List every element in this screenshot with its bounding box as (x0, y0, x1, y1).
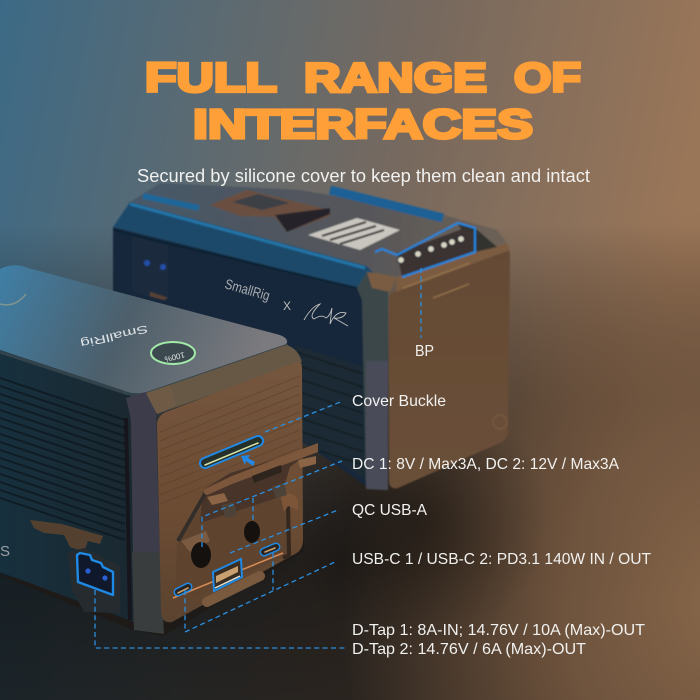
logo: SmallRig rear: SmallRig (223, 276, 272, 304)
rear device side face (113, 227, 366, 486)
rear device blue edge band (113, 202, 378, 288)
title: RANGE (304, 54, 487, 100)
label: USB-A: QC USB-A (352, 502, 427, 519)
leader: BP (420, 268, 422, 338)
cover teeth (252, 465, 282, 483)
end-face ribs (160, 376, 300, 504)
cover left knob (181, 531, 210, 552)
label: DC: DC 1: 8V / Max3A, DC 2: 12V / Max3A (352, 456, 619, 473)
cover plate (200, 447, 317, 523)
USB-C port 2 (264, 547, 276, 552)
logo: signature (304, 304, 348, 326)
spec label (308, 218, 400, 250)
cover bolts (221, 483, 287, 518)
front battery device (0, 265, 318, 636)
corner pillar (357, 272, 397, 490)
cover buckle slot (205, 441, 258, 465)
D-Tap port (68, 548, 120, 613)
front device top face (0, 265, 287, 394)
cover left arm (178, 494, 205, 541)
USB-A port (213, 559, 242, 591)
recessed port area (175, 480, 288, 606)
label: Cover Buckle: Cover Buckle (352, 393, 446, 410)
title: INTERFACES (193, 101, 533, 147)
rear battery device (113, 183, 510, 490)
label: BP: BP (415, 343, 434, 360)
BP terminal (375, 223, 497, 277)
DC port 1 (191, 542, 211, 568)
leader lines (95, 268, 421, 648)
indicator ring 100%: 100% (164, 350, 186, 364)
bottom orange light strip (173, 553, 283, 598)
indicator ring 100% (151, 342, 195, 364)
bottom pull handle (207, 576, 260, 602)
USB-C port 1 (178, 587, 188, 593)
DC port 2 (244, 521, 260, 543)
front corner pillar (126, 392, 162, 630)
label: D-Tap 2: D-Tap 2: 14.76V / 6A (Max)-OUT (352, 641, 586, 658)
subtitle: Secured by silicone cover to keep them clean and intact (137, 166, 590, 186)
front device ribs (0, 378, 125, 540)
leader: cover buckle (265, 401, 343, 432)
latch on rear left (132, 236, 168, 298)
label: D-Tap 1: D-Tap 1: 8A-IN; 14.76V / 10A (Max)-OUT (352, 622, 645, 639)
V-mount plate (210, 190, 330, 232)
arrow: cover into buckle (241, 455, 255, 466)
partial logo letters S: S (0, 543, 10, 560)
leader: USB-A (230, 510, 338, 553)
cover right arm (283, 500, 289, 558)
leader: D-Tap (95, 590, 345, 648)
front device brown end face (157, 362, 303, 622)
label: USB-C: USB-C 1 / USB-C 2: PD3.1 140W IN / OUT (352, 551, 651, 568)
title: FULL (145, 54, 277, 100)
side flap (30, 520, 103, 552)
decorative arc on top (0, 294, 26, 305)
silicone cover frame (178, 443, 318, 558)
logo: X: X (283, 299, 291, 313)
cover right knob (280, 493, 298, 512)
rear device ribbed lower side (296, 345, 366, 480)
cover upper tabs (207, 456, 316, 505)
leader: USB-C (185, 553, 335, 632)
leader: DC (202, 461, 342, 547)
rear device brown end face (389, 249, 510, 488)
front device side face (0, 350, 134, 622)
title (145, 54, 581, 147)
rear device top face (130, 183, 507, 277)
front device base shadow (0, 540, 304, 636)
title: OF (514, 54, 581, 100)
logo: SmallRig front: SmallRig (79, 322, 149, 349)
